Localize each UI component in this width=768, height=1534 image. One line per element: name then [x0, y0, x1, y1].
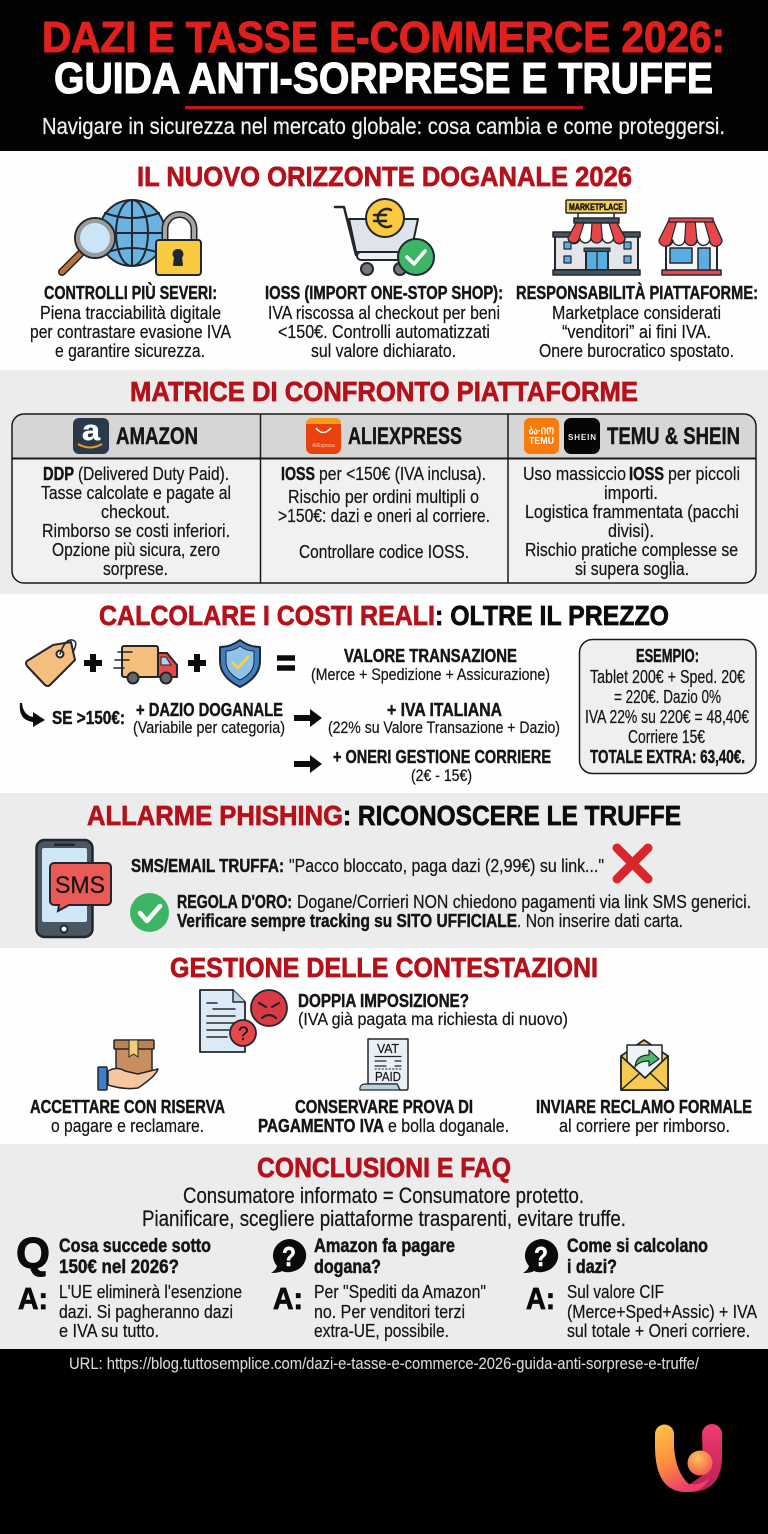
scam sms text: SMS/EMAIL TRUFFA:	[131, 855, 284, 876]
column text: temu and shein: divisi).	[608, 520, 654, 541]
faq 2	[271, 1235, 486, 1341]
conclusion text	[142, 1183, 626, 1231]
icon: vat paid receipt	[360, 1039, 408, 1090]
text block: responsabilità	[516, 282, 758, 361]
golden rule text: Verificare sempre tracking su SITO UFFICIALE	[177, 910, 517, 931]
text block: ioss	[265, 282, 503, 361]
icon: red cross	[617, 848, 648, 879]
logo: tuttosemplice	[655, 1424, 722, 1492]
step: conservare: PAGAMENTO IVA	[258, 1115, 384, 1136]
golden rule text: . Non inserire dati carta.	[517, 910, 683, 931]
label: valore transazione	[311, 645, 550, 684]
column text: amazon: sorprese.	[103, 558, 168, 579]
text block: controlli: e garantire sicurezza.	[55, 340, 205, 361]
column text: amazon: DDP	[43, 463, 74, 484]
icon: price tag	[26, 640, 76, 686]
golden rule text: REGOLA D'ORO:	[177, 891, 292, 912]
text block: ioss: sul valore dichiarato.	[311, 340, 456, 361]
label: dazio doganale: + DAZIO DOGANALE	[136, 699, 283, 720]
callout: esempio	[580, 640, 756, 774]
column text: amazon: (Delivered Duty Paid).	[78, 463, 229, 484]
text block: responsabilità: “venditori” ai fini IVA.	[562, 321, 711, 342]
plus sign	[84, 654, 102, 672]
scam sms text: "Pacco bloccato, paga dazi (2,99€) su link..."	[289, 855, 604, 876]
label: oneri corriere: (2€ - 15€)	[411, 766, 472, 785]
column text: aliexpress	[278, 463, 490, 562]
arrow	[294, 755, 322, 773]
arrow	[294, 709, 322, 727]
text block: ioss: <150€. Controlli automatizzati	[278, 321, 490, 342]
callout: esempio: ESEMPIO:	[636, 645, 699, 666]
icon: phone with sms bubble: SMS	[55, 872, 105, 899]
icon: cart with euro and check	[335, 199, 434, 275]
faq 3: Sul valore CIF	[567, 1281, 664, 1302]
text block: responsabilità: Onere burocratico spostato.	[539, 340, 734, 361]
icon: question bubble	[271, 1239, 306, 1273]
icon: phone with sms bubble	[36, 840, 111, 937]
logo: temu	[524, 418, 559, 454]
panel: allarme phishing	[0, 793, 768, 948]
icon: envelope with arrow	[621, 1040, 668, 1090]
faq 1: A:	[18, 1281, 48, 1316]
arrow: curved	[20, 703, 45, 727]
column text: temu and shein: importi.	[604, 482, 658, 503]
icon: hand with box	[98, 1040, 158, 1090]
plus sign	[188, 654, 206, 672]
icon: Q: Q	[16, 1229, 50, 1278]
faq 1: L'UE eliminerà l'esenzione	[59, 1281, 242, 1302]
red divider	[185, 106, 583, 109]
label: se oltre 150: SE >150€:	[52, 707, 125, 728]
icon: green check	[130, 893, 169, 932]
faq 1: e IVA su tutto.	[59, 1320, 159, 1341]
faq 1: 150€ nel 2026?	[59, 1256, 179, 1278]
step: accettare: ACCETTARE CON RISERVA	[30, 1096, 225, 1117]
table	[12, 414, 756, 583]
panel: nuovo orizzonte doganale	[0, 151, 768, 370]
logo: shein: SHEIN	[568, 433, 596, 442]
heading: : RICONOSCERE LE TRUFFE	[343, 800, 681, 831]
callout: esempio: Corriere 15€	[628, 726, 706, 747]
heading: IL NUOVO ORIZZONTE DOGANALE 2026	[137, 161, 632, 192]
panel: contestazioni	[0, 948, 768, 1144]
text block: controlli: CONTROLLI PIÙ SEVERI:	[44, 282, 217, 303]
logo: temu: ბა·ᲘᲝ	[529, 426, 554, 436]
heading: GESTIONE DELLE CONTESTAZIONI	[170, 952, 598, 983]
column text: temu and shein: Uso massiccio	[523, 463, 626, 484]
text block: responsabilità: Marketplace considerati	[552, 302, 721, 323]
text block: ioss: IVA riscossa al checkout per beni	[268, 302, 500, 323]
step: accettare: o pagare e reclamare.	[51, 1115, 204, 1136]
header panel	[0, 0, 768, 151]
heading: : OLTRE IL PREZZO	[435, 600, 669, 631]
label: oneri corriere	[333, 746, 551, 785]
step: inviare: al corriere per rimborso.	[559, 1115, 730, 1136]
label: dazio doganale	[133, 699, 285, 737]
icon: question bubble	[523, 1239, 558, 1273]
heading: ALLARME PHISHING	[87, 800, 343, 831]
step: inviare	[536, 1096, 752, 1136]
faq 2: no. Per venditori terzi	[314, 1301, 465, 1322]
logo: aliexpress: AliExpress	[312, 443, 335, 449]
column text: aliexpress: per <150€ (IVA inclusa).	[319, 463, 486, 484]
faq 2: extra-UE, possibile.	[314, 1320, 449, 1341]
column text: temu and shein: IOSS	[629, 463, 664, 484]
faq 1: dazi. Si pagheranno dazi	[59, 1301, 233, 1322]
column text: aliexpress: Rischio per ordini multipli o	[288, 486, 479, 507]
column text: temu and shein	[523, 463, 740, 579]
faq 1: Cosa succede sotto	[59, 1235, 211, 1257]
heading	[99, 600, 669, 631]
step: accettare	[30, 1096, 225, 1136]
logo: amazon	[73, 415, 109, 454]
icon: question bubble: ?	[282, 1241, 296, 1272]
faq 2: dogana?	[314, 1256, 381, 1278]
column text: temu and shein: per piccoli	[668, 463, 740, 484]
column text: amazon: Tasse calcolate e pagate al	[41, 482, 231, 503]
amazon label: AMAZON	[116, 423, 198, 450]
icon: marketplace and small shop: MARKETPLACE	[569, 202, 623, 212]
icon: delivery truck	[114, 646, 177, 684]
step: conservare	[258, 1096, 509, 1136]
logo: aliexpress	[306, 418, 341, 454]
label: iva italiana	[328, 699, 560, 737]
faq 3: A:	[526, 1281, 555, 1316]
icon: question bubble: ?	[534, 1241, 548, 1272]
column text: amazon	[41, 463, 231, 579]
faq 2: Amazon fa pagare	[314, 1235, 455, 1257]
column text: aliexpress: >150€: dazi e oneri al corriere.	[278, 505, 490, 526]
heading	[87, 800, 681, 831]
text block: controlli: Piena tracciabilità digitale	[40, 302, 221, 323]
faq 2: A:	[273, 1281, 303, 1316]
icon: marketplace and small shop	[553, 200, 722, 275]
icon: shield	[220, 640, 260, 687]
text block: ioss: IOSS (IMPORT ONE-STOP SHOP):	[265, 282, 503, 303]
icon: vat paid receipt: VAT	[377, 1041, 399, 1056]
icon: vat paid receipt: PAID	[375, 1069, 401, 1084]
logo: shein	[564, 418, 600, 454]
column text: temu and shein: Logistica frammentata (pacchi	[525, 501, 739, 522]
faq 3	[523, 1235, 758, 1341]
heading: MATRICE DI CONFRONTO PIATTAFORME	[130, 376, 638, 407]
label: oneri corriere: + ONERI GESTIONE CORRIERE	[333, 746, 551, 767]
column text: aliexpress: IOSS	[281, 463, 315, 484]
label: valore transazione: VALORE TRANSAZIONE	[344, 645, 517, 666]
label: iva italiana: + IVA ITALIANA	[387, 699, 502, 720]
text block: controlli: per contrastare evasione IVA	[30, 321, 232, 342]
faq 1	[16, 1229, 242, 1341]
column text: amazon: Opzione più sicura, zero	[52, 539, 220, 560]
heading: CALCOLARE I COSTI REALI	[99, 600, 435, 631]
panel: matrice piattaforme	[0, 370, 768, 594]
label: doppia imposizione	[298, 990, 568, 1029]
step: conservare: CONSERVARE PROVA DI	[295, 1096, 473, 1117]
icon: globe, magnifier and padlock	[62, 200, 201, 275]
text block: controlli	[30, 282, 232, 361]
label: valore transazione: (Merce + Spedizione + Assicurazione)	[311, 665, 550, 684]
column text: amazon: checkout.	[101, 501, 170, 522]
column text: amazon: Rimborso se costi inferiori.	[42, 520, 230, 541]
heading: CONCLUSIONI E FAQ	[257, 1152, 511, 1183]
panel: calcolare i costi	[0, 594, 768, 793]
conclusion text: Pianificare, scegliere piattaforme trasparenti, evitare truffe.	[142, 1206, 626, 1231]
label: doppia imposizione: DOPPIA IMPOSIZIONE?	[298, 990, 469, 1011]
step: conservare: e bolla doganale.	[388, 1115, 509, 1136]
column text: aliexpress: Controllare codice IOSS.	[299, 541, 469, 562]
faq 3: i dazi?	[567, 1256, 617, 1278]
panel: conclusioni e faq	[0, 1144, 768, 1349]
callout: esempio: = 220€. Dazio 0%	[614, 686, 721, 707]
icon: document, question mark and angry face: ?	[238, 1024, 249, 1045]
label: iva italiana: (22% su Valore Transazione + Dazio)	[328, 718, 560, 737]
golden rule text	[177, 891, 751, 931]
equals sign	[277, 658, 295, 668]
label: dazio doganale: (Variabile per categoria)	[133, 718, 285, 737]
column text: temu and shein: si supera soglia.	[575, 558, 689, 579]
aliexpress label: ALIEXPRESS	[348, 423, 462, 450]
logo: temu: TEMU	[529, 436, 554, 447]
conclusion text: Consumatore informato = Consumatore protetto.	[183, 1183, 584, 1208]
logo: amazon: a	[82, 415, 101, 447]
title line 1: DAZI E TASSE E-COMMERCE 2026:	[42, 13, 725, 62]
icon: document, question mark and angry face	[200, 990, 287, 1052]
label: doppia imposizione: (IVA già pagata ma richiesta di nuovo)	[298, 1009, 568, 1029]
column text: temu and shein: Rischio pratiche complesse se	[525, 539, 738, 560]
faq 3: Come si calcolano	[567, 1235, 708, 1257]
faq 2: Per "Spediti da Amazon"	[314, 1281, 486, 1302]
scam sms text	[131, 855, 604, 876]
